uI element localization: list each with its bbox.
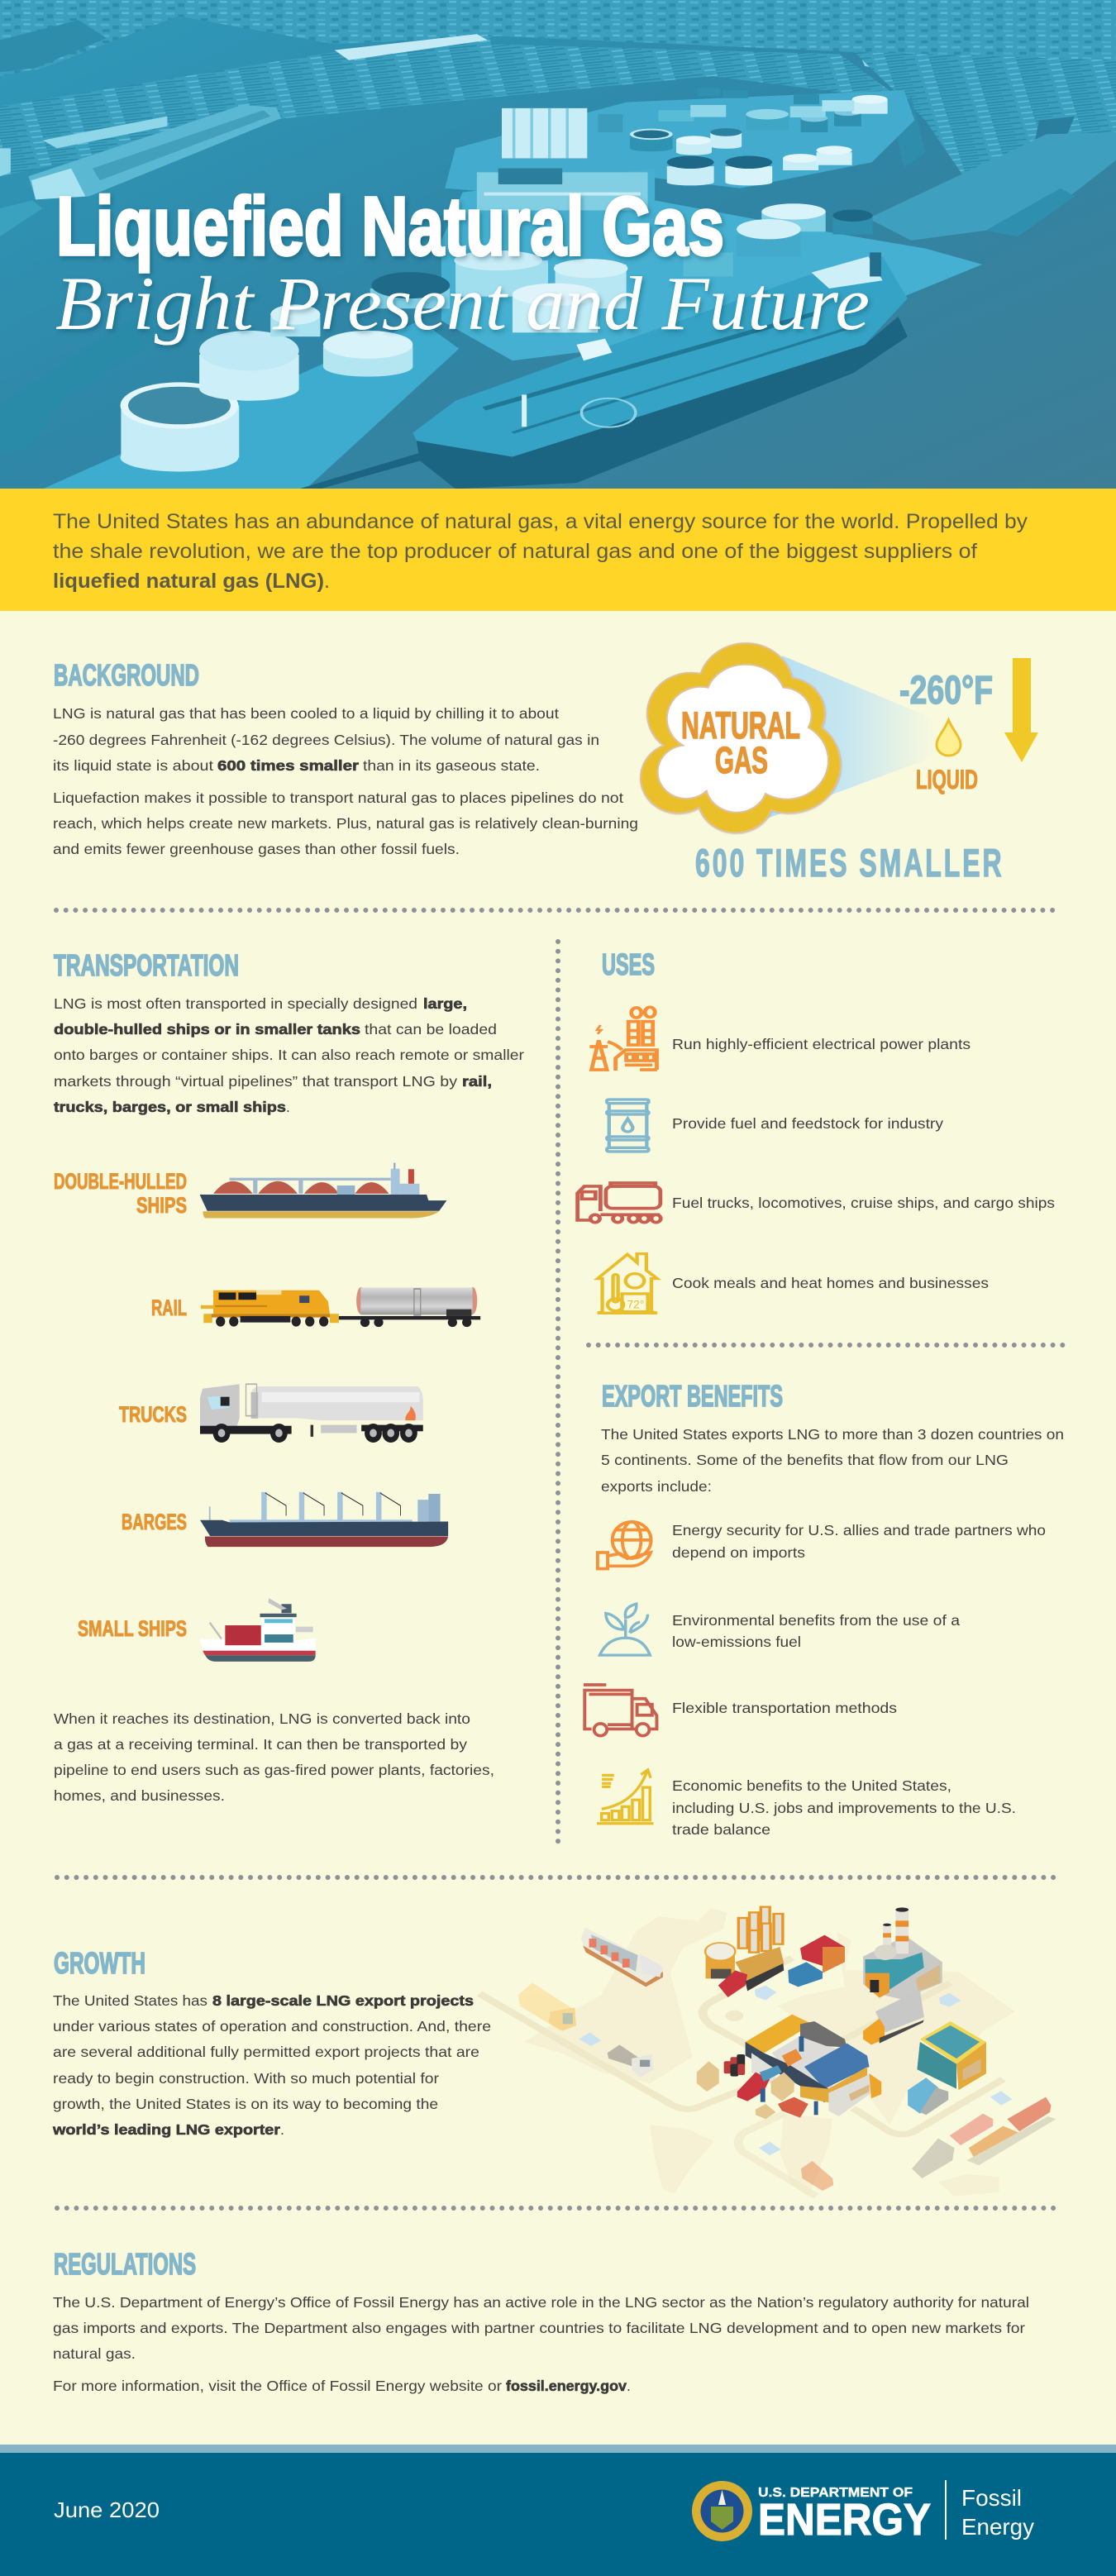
DOE seal (692, 2481, 752, 2541)
label: double-hulled ships: SHIPS (136, 1193, 187, 1218)
title (55, 180, 870, 346)
heading: export benefits: EXPORT BENEFITS (602, 1379, 783, 1413)
factory (863, 1907, 942, 1999)
teal building (917, 2021, 986, 2090)
transportation closing text (54, 1710, 494, 1804)
benefit text: energy security: Energy security for U.S. allies and trade partners who (672, 1522, 1046, 1538)
growth text: The United States has (53, 1992, 207, 2009)
hero tank farm (454, 88, 888, 332)
office name: Energy (961, 2514, 1034, 2540)
illustration: small ship (200, 1598, 316, 1662)
growth text: ready to begin construction. With so much potential for (53, 2070, 439, 2087)
dump truck (518, 1982, 576, 2031)
faded cart (801, 2161, 833, 2191)
transportation intro text: . (286, 1099, 290, 1115)
hero photo: aerial view of LNG terminal (0, 0, 1116, 489)
shrink cone (767, 656, 935, 818)
intro band: the shale revolution, we are the top producer of natural gas and one of the biggest suppliers of (53, 540, 977, 563)
illustration: barge (200, 1492, 448, 1547)
benefit text: environmental (672, 1612, 960, 1650)
silos (705, 1907, 783, 1978)
benefit text: economic (672, 1777, 1016, 1838)
freight trains (912, 2097, 1056, 2178)
panel: uses (578, 947, 1055, 1313)
uses text: power plants: Run highly-efficient electrical power plants (672, 1036, 971, 1052)
transportation intro text: LNG is most often transported in specially designed (54, 995, 417, 1012)
transportation intro text: that can be loaded (365, 1021, 497, 1038)
growth text: growth, the United States is on its way to becoming the (53, 2096, 438, 2112)
workers and small vehicles (737, 2036, 818, 2118)
intro band: liquefied natural gas (LNG) (53, 570, 324, 593)
blue truck (908, 2077, 948, 2115)
benefit text: flexible transport: Flexible transportation methods (672, 1700, 897, 1716)
liquid label: LIQUID (916, 765, 978, 794)
background text: and emits fewer greenhouse gases than other fossil fuels. (53, 841, 460, 857)
footer (0, 2445, 1116, 2576)
icon: power plant (589, 1007, 657, 1071)
transportation closing text: a gas at a receiving terminal. It can then be transported by (54, 1736, 467, 1753)
benefit text: environmental: low-emissions fuel (672, 1634, 801, 1650)
icon: globe in hand (598, 1522, 651, 1569)
shipping containers (788, 1935, 845, 1987)
diagram: gas to liquid (641, 643, 1038, 885)
title: Liquefied Natural Gas (56, 180, 724, 273)
white truck (828, 2073, 881, 2116)
warehouse (746, 2015, 869, 2102)
icon: liquid drop (937, 720, 961, 756)
intro band: The United States has an abundance of natural gas, a vital energy source for the world. Propelled by (53, 510, 1028, 533)
growth text: world’s leading LNG exporter (52, 2121, 280, 2138)
title: Bright Present and Future (55, 261, 870, 346)
label: double-hulled ships (54, 1169, 187, 1218)
hero lower-left terminal (0, 272, 459, 489)
transportation intro text: rail, (462, 1073, 492, 1090)
export intro text: The United States exports LNG to more than 3 dozen countries on (601, 1426, 1064, 1443)
illustration: LNG carrier (200, 1163, 446, 1218)
regulations text: natural gas. (53, 2345, 136, 2362)
regulations text: gas imports and exports. The Department also engages with partner countries to facilitate LNG development and to open new markets for (53, 2320, 1025, 2336)
gas cloud: NATURAL (681, 704, 800, 747)
heading: uses: USES (602, 947, 655, 981)
regulations text: For more information, visit the Office of Fossil Energy website or (53, 2378, 502, 2394)
benefit text: economic: Economic benefits to the United States, (672, 1777, 951, 1794)
transportation closing text: When it reaches its destination, LNG is converted back into (54, 1710, 470, 1727)
transportation intro text (54, 995, 524, 1115)
illustration: LNG supply chain on world map (479, 1907, 1056, 2197)
hero tanker ship (413, 252, 908, 489)
regulations text: . (627, 2378, 631, 2394)
background text: 600 times smaller (217, 757, 359, 774)
benefit text: energy security (672, 1522, 1046, 1561)
transportation closing text: homes, and businesses. (54, 1787, 225, 1804)
office name: Fossil (961, 2485, 1022, 2511)
heading: regulations: REGULATIONS (54, 2247, 196, 2281)
growth text: under various states of operation and construction. And, there (53, 2018, 491, 2035)
gas cloud (641, 643, 841, 832)
ship (581, 1928, 663, 1987)
grey cargo truck (863, 1990, 924, 2044)
benefit text: economic: trade balance (672, 1821, 770, 1838)
transportation intro text: markets through “virtual pipelines” that transport LNG by (54, 1073, 457, 1090)
illustration: tanker truck (200, 1384, 423, 1443)
background text: -260 degrees Fahrenheit (-162 degrees Celsius). The volume of natural gas in (53, 732, 599, 748)
world map (524, 1908, 1015, 2197)
panel: regulations (53, 2247, 1029, 2394)
ice tiles (579, 1986, 1012, 2155)
uses text: homes: Cook meals and heat homes and businesses (672, 1275, 989, 1291)
benefit text: environmental: Environmental benefits from the use of a (672, 1612, 960, 1629)
panel: growth (52, 1907, 1056, 2197)
DOE wordmark: ENERGY (758, 2495, 931, 2545)
transportation intro text: onto barges or container ships. It can also reach remote or smaller (54, 1047, 524, 1063)
gas cloud: GAS (715, 739, 768, 781)
growth text: . (280, 2121, 284, 2138)
callout: 600 times smaller: 600 TIMES SMALLER (695, 842, 1002, 885)
heading: transportation: TRANSPORTATION (54, 948, 239, 982)
label: double-hulled ships: DOUBLE-HULLED (54, 1169, 187, 1194)
background text: reach, which helps create new markets. Plus, natural gas is relatively clean-burning (53, 815, 638, 832)
grey truck (608, 2044, 653, 2077)
icon: smart home (598, 1254, 657, 1313)
background text: LNG is natural gas that has been cooled to a liquid by chilling it to about (53, 705, 559, 722)
icon: sprout (600, 1604, 650, 1655)
icon: growth chart (597, 1770, 654, 1824)
transportation intro text: large, (423, 995, 467, 1012)
cargo boxes (697, 2061, 794, 2119)
date: June 2020 (54, 2497, 160, 2522)
roads (479, 1958, 1004, 2197)
label: small ships: SMALL SHIPS (78, 1616, 187, 1641)
intro band: . (324, 570, 330, 593)
icon: fuel barrel (607, 1100, 648, 1152)
intro band (0, 489, 1116, 611)
background text (53, 705, 638, 857)
export intro text: 5 continents. Some of the benefits that flow from our LNG (601, 1452, 1009, 1468)
transportation closing text: pipeline to end users such as gas-fired power plants, factories, (54, 1762, 494, 1778)
transportation intro text: trucks, barges, or small ships (54, 1099, 286, 1115)
heading: background: BACKGROUND (54, 658, 199, 692)
benefit text: energy security: depend on imports (672, 1544, 805, 1561)
illustration: rail (201, 1287, 480, 1327)
benefit text: economic: including U.S. jobs and improvements to the U.S. (672, 1800, 1016, 1816)
label: rail: RAIL (151, 1295, 187, 1320)
icon: smart home: 72° (627, 1299, 644, 1311)
panel: background (53, 658, 638, 857)
DOE wordmark: U.S. DEPARTMENT OF (758, 2486, 913, 2500)
regulations text (53, 2294, 1029, 2394)
background text: than in its gaseous state. (363, 757, 540, 774)
export intro text: exports include: (601, 1478, 712, 1495)
background text: its liquid state is about (53, 757, 213, 774)
growth text (52, 1992, 491, 2138)
growth text: 8 large-scale LNG export projects (212, 1992, 474, 2009)
uses text: industry: Provide fuel and feedstock for industry (672, 1115, 943, 1132)
red tanker truck (718, 1947, 784, 1997)
label: barges: BARGES (122, 1510, 187, 1534)
growth text: are several additional fully permitted export projects that are (53, 2044, 479, 2060)
panel: export benefits (584, 1379, 1064, 1838)
icon: tanker truck (578, 1183, 661, 1223)
barrels (724, 2054, 745, 2077)
temperature: -260°F (899, 669, 993, 713)
office name (961, 2485, 1034, 2540)
label: trucks: TRUCKS (119, 1402, 187, 1427)
icon: delivery truck (584, 1685, 656, 1736)
uses text: vehicles: Fuel trucks, locomotives, cruise ships, and cargo ships (672, 1195, 1055, 1211)
export intro text (601, 1426, 1064, 1495)
background text: Liquefaction makes it possible to transport natural gas to places pipelines do not (53, 789, 623, 806)
arrow: temperature down (1004, 658, 1038, 762)
regulations text: fossil.energy.gov (506, 2378, 627, 2394)
transportation intro text: double-hulled ships or in smaller tanks (54, 1021, 360, 1038)
regulations text: The U.S. Department of Energy’s Office of Fossil Energy has an active role in the LNG sector as the Nation’s regulatory authority for natural (53, 2294, 1029, 2311)
heading: growth: GROWTH (54, 1946, 145, 1980)
panel: transportation (54, 948, 524, 1804)
